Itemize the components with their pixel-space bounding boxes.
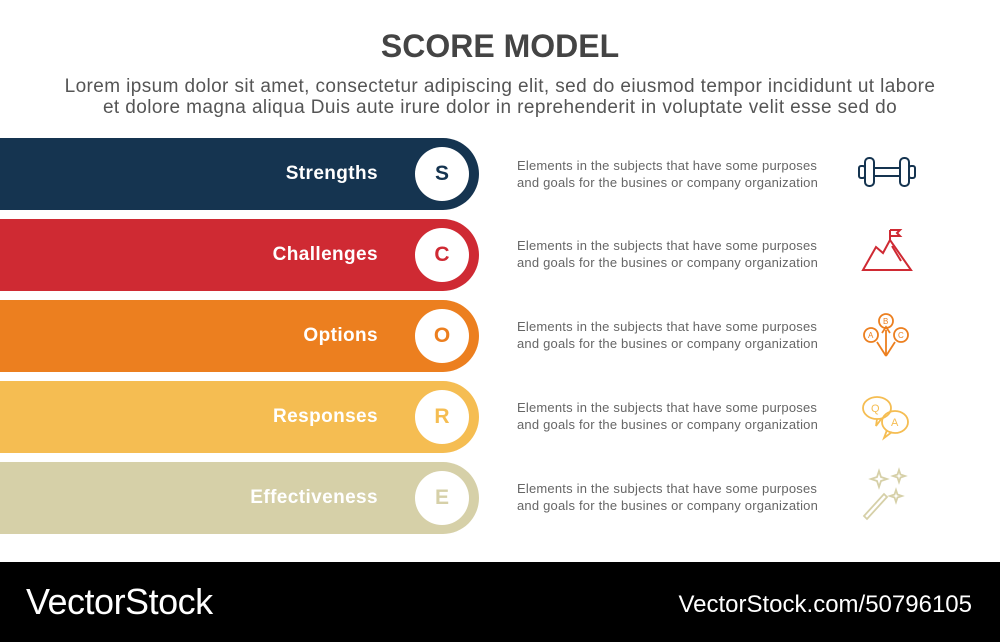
text: options: and goals for the busines or company organization [517, 336, 818, 351]
icon: Q&A bubbles: A [891, 417, 899, 429]
bar: strengths: S [435, 162, 449, 185]
icon: ABC choices: C [898, 331, 904, 340]
bar: effectiveness [0, 462, 479, 534]
bar: options: O [434, 324, 450, 347]
footer brand: VectorStock [26, 581, 213, 622]
text: challenges: and goals for the busines or company organization [517, 255, 818, 270]
bar: challenges [0, 219, 479, 291]
footer id: VectorStock.com/50796105 [678, 591, 972, 618]
text: effectiveness: Elements in the subjects that have some purposes [517, 481, 817, 496]
icon: ABC choices [863, 313, 909, 356]
subtitle [65, 76, 935, 118]
text: responses: and goals for the busines or company organization [517, 417, 818, 432]
bar: responses [0, 381, 479, 453]
bar: strengths: Strengths [286, 163, 378, 184]
text: responses: Elements in the subjects that have some purposes [517, 400, 817, 415]
text: responses [517, 400, 818, 432]
title: SCORE MODEL [381, 28, 619, 64]
icon: magic wand [862, 468, 908, 520]
bar: options [0, 300, 479, 372]
text: challenges: Elements in the subjects that have some purposes [517, 238, 817, 253]
icon: dumbbell [858, 157, 916, 187]
text: strengths: Elements in the subjects that have some purposes [517, 158, 817, 173]
text: effectiveness [517, 481, 818, 513]
bar: responses: Responses [273, 406, 378, 427]
bar: effectiveness: E [435, 486, 449, 509]
text: options [517, 319, 818, 351]
icon: ABC choices: B [883, 317, 888, 326]
bar: challenges: Challenges [273, 244, 378, 265]
bar: effectiveness: Effectiveness [250, 487, 378, 508]
footer [0, 562, 1000, 642]
bar: challenges: C [434, 243, 450, 266]
bar: strengths [0, 138, 479, 210]
icon: Q&A bubbles: Q [871, 403, 880, 415]
text: effectiveness: and goals for the busines or company organization [517, 498, 818, 513]
text: strengths [517, 158, 818, 190]
subtitle: Lorem ipsum dolor sit amet, consectetur adipiscing elit, sed do eiusmod tempor incididunt ut labore [65, 76, 935, 97]
subtitle: et dolore magna aliqua Duis aute irure dolor in reprehenderit in voluptate velit esse sed do [103, 97, 897, 118]
text: challenges [517, 238, 818, 270]
text: options: Elements in the subjects that have some purposes [517, 319, 817, 334]
icon: ABC choices: A [868, 331, 874, 340]
icon: mountain flag [861, 229, 913, 271]
bar: responses: R [434, 405, 450, 428]
bar: options: Options [303, 325, 378, 346]
icon: Q&A bubbles [862, 396, 909, 440]
text: strengths: and goals for the busines or company organization [517, 175, 818, 190]
